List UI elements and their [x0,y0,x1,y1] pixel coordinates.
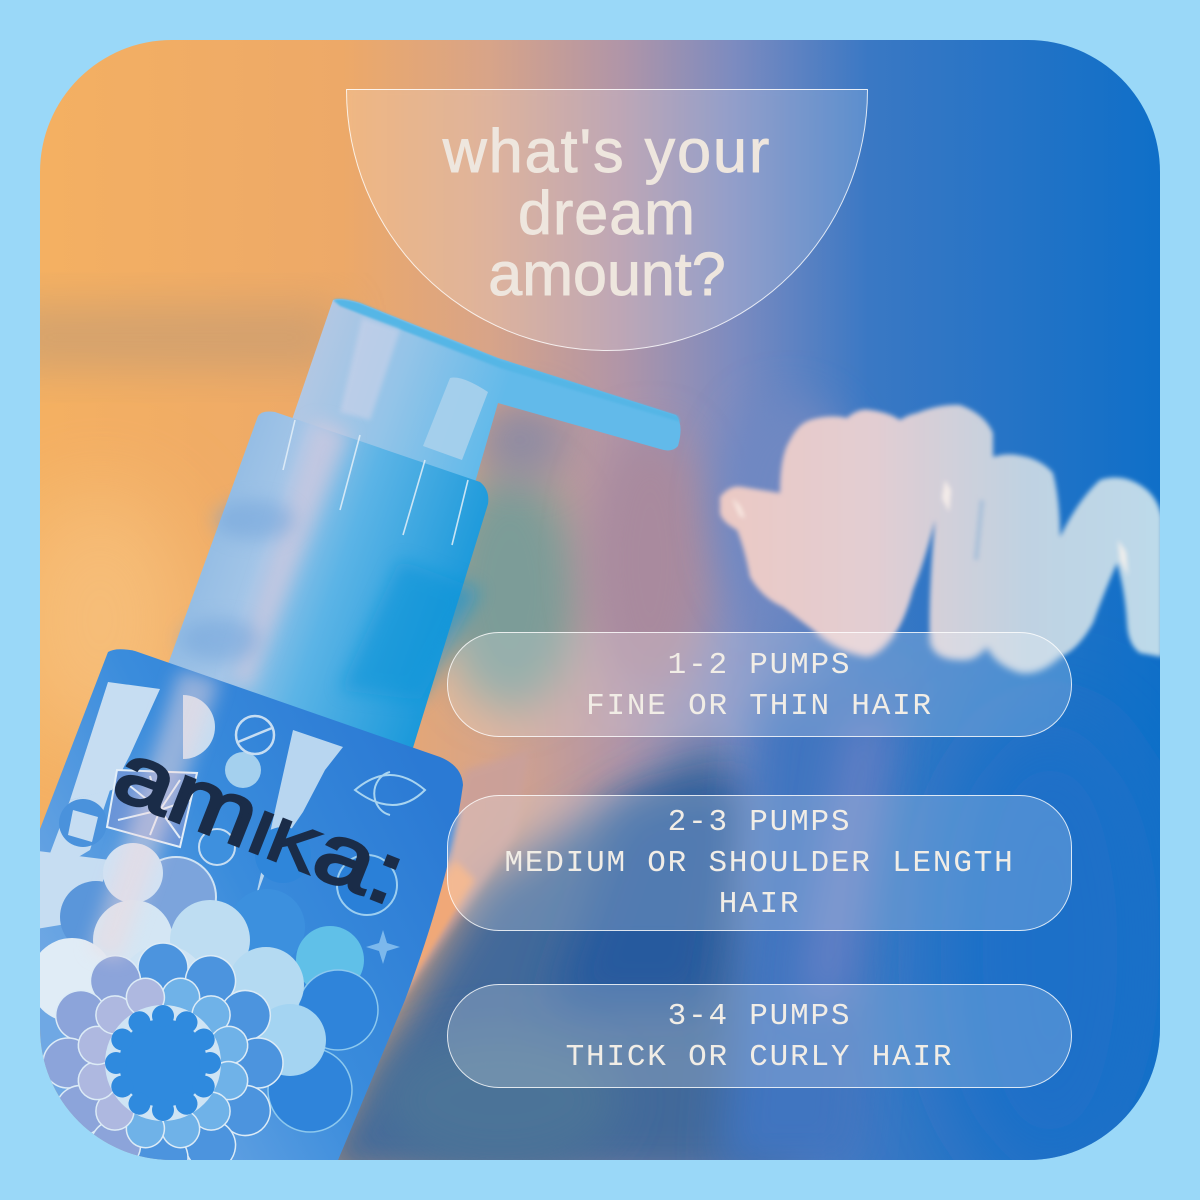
pill: 3-4 pumps: THICK OR CURLY HAIR [566,1040,953,1075]
bottle body with printed pattern [40,649,463,1160]
pump head and nozzle [292,298,680,480]
heading semicircle: what's your dream amount?: amount? [488,240,726,308]
heading semicircle: what's your dream amount?: what's your [443,117,771,185]
pump bottle [30,299,681,1183]
pill: 2-3 pumps: MEDIUM OR SHOULDER LENGTH [504,846,1015,881]
pill: 2-3 pumps: 2-3 PUMPS [668,805,851,840]
pill: 2-3 pumps: HAIR [719,887,800,922]
geometric print [30,682,343,930]
transparent collar [168,412,488,748]
pill: 3-4 pumps [447,984,1072,1088]
pill: 1-2 pumps [447,632,1072,737]
pill: 1-2 pumps: 1-2 PUMPS [668,648,851,683]
heading semicircle: what's your dream amount?: dream [518,178,696,246]
flower clouds [30,843,378,1132]
pill: 3-4 pumps: 3-4 PUMPS [668,999,851,1034]
pill: 1-2 pumps: FINE OR THIN HAIR [586,689,933,724]
pill: 2-3 pumps [447,795,1072,931]
heading semicircle: what's your dream amount? [346,89,868,351]
soft background colour fields [0,305,1160,1190]
cream swirl [720,405,1162,673]
logo: amika: amika: [102,723,418,923]
